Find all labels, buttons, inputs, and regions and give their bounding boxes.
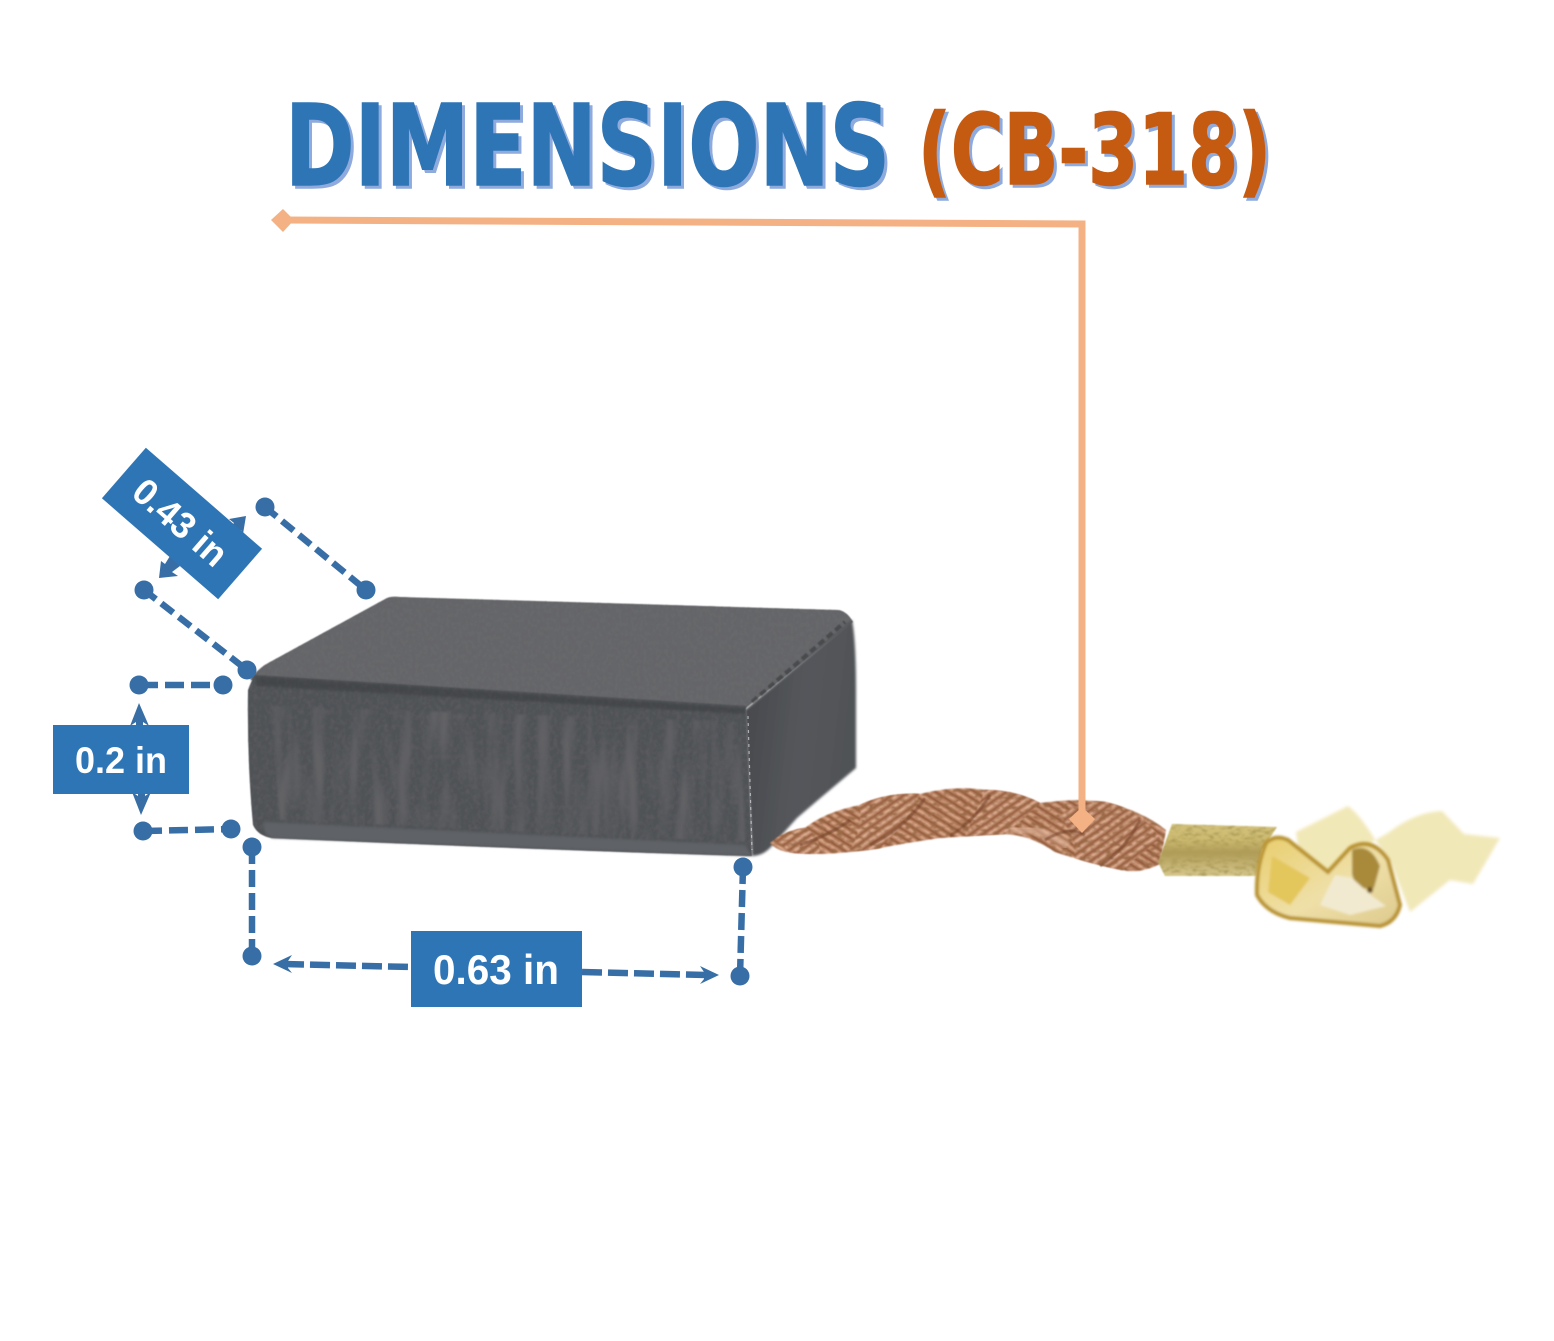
label box: 0.2 in	[75, 740, 167, 781]
arrow: up-right	[228, 516, 246, 538]
label box: 0.43 in	[124, 470, 236, 575]
photo: carbon brush	[248, 597, 1500, 926]
title word: DIMENSIONS: DIMENSIONS	[285, 82, 890, 212]
leader start diamond	[271, 209, 294, 232]
leader end diamond	[1069, 807, 1095, 833]
brush front face	[248, 622, 845, 856]
dimension: 0.43 in	[102, 448, 375, 680]
arrow: up	[130, 703, 149, 730]
title model: (CB-318): (CB-318)	[918, 94, 1271, 208]
terminal pale wings	[1296, 806, 1500, 912]
title word: DIMENSIONS: DIMENSIONS	[288, 85, 893, 215]
label box	[411, 931, 582, 1007]
dashed guide: top	[130, 676, 232, 694]
arrow: right	[582, 966, 719, 984]
label box	[53, 725, 189, 794]
dashed guide: upper	[256, 498, 376, 600]
dimension: 0.2 in	[53, 676, 240, 840]
arrow: left	[273, 955, 411, 973]
title model: (CB-318): (CB-318)	[921, 97, 1274, 211]
dashed guide: lower	[134, 580, 256, 680]
arrow: down-left	[159, 556, 180, 578]
arrow: down	[132, 788, 151, 815]
dashed guide: bottom	[134, 820, 240, 840]
dashed guide: right	[730, 858, 752, 986]
dimension: 0.63 in	[242, 838, 752, 1007]
dashed guide: left	[242, 838, 262, 966]
label box	[102, 448, 262, 599]
orange leader line	[271, 209, 1095, 833]
copper wire	[770, 788, 1166, 871]
brush side face	[745, 620, 856, 856]
brush top face	[250, 597, 853, 708]
terminal crimp	[1158, 824, 1277, 876]
label box: 0.63 in	[433, 946, 559, 993]
title	[285, 82, 1274, 215]
terminal front fold	[1257, 838, 1400, 926]
